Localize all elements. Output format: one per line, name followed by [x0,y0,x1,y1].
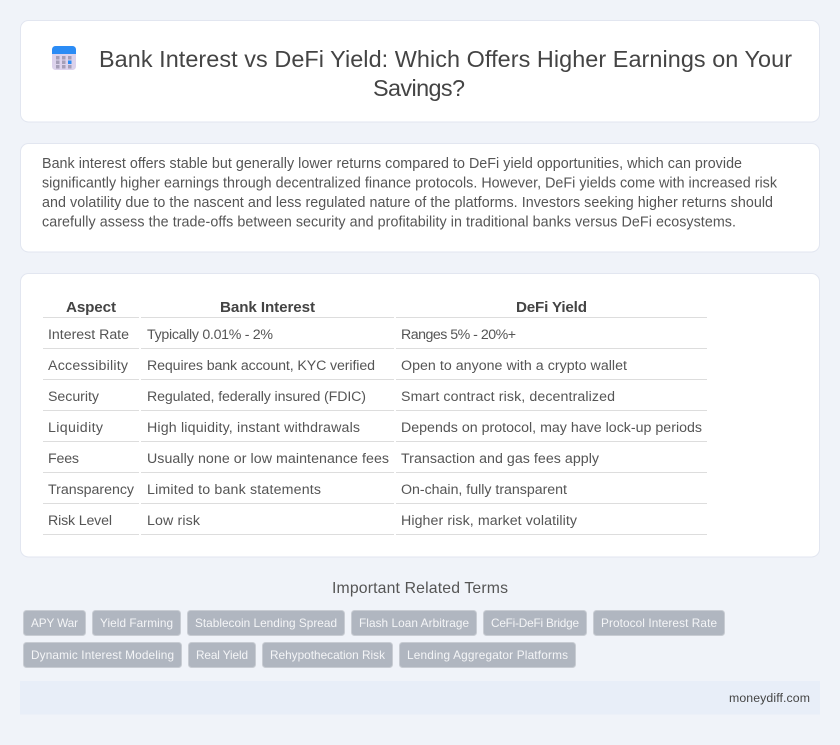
row: fees: Transaction and gas fees apply [401,451,600,467]
tag: Rehypothecation Risk: Rehypothecation Risk [270,648,385,662]
tag: Dynamic Interest Modeling [24,642,182,668]
tag: Stablecoin Lending Spread: Stablecoin Lending Spread [195,616,337,630]
tag: Flash Loan Arbitrage: Flash Loan Arbitrage [359,616,469,630]
row: fees: Fees [48,451,79,467]
tag: Stablecoin Lending Spread [188,610,344,636]
row: liquidity: Liquidity [48,420,104,436]
row: interest rate: Ranges 5% - 20%+ [401,327,516,343]
table header: DeFi Yield [516,299,587,316]
tag: Real Yield [188,642,256,668]
panel: summary paragraph: carefully assess the trade-offs between security and profitability in traditional banks versus DeFi ecosystems. [42,214,736,230]
row: liquidity [43,420,707,442]
row: security [43,389,707,411]
tag: APY War [24,610,86,636]
panel: summary paragraph: significantly higher earnings through decentralized finance protocols. However, DeFi yields come with increased risk [42,176,778,192]
row: transparency: On-chain, fully transparent [401,482,567,498]
footer bar [20,681,820,714]
tag: Yield Farming: Yield Farming [100,616,173,630]
row: fees: Usually none or low maintenance fees [147,451,389,467]
footer bar: moneydiff.com [729,691,810,705]
table header [43,299,707,318]
heading: important related terms: Important Related Terms [332,580,508,597]
tag: Rehypothecation Risk [262,642,392,668]
related term tags [24,610,724,668]
tag: APY War: APY War [31,616,78,630]
row: risk level: Higher risk, market volatility [401,513,578,529]
panel: title card [20,20,820,122]
row: accessibility: Open to anyone with a crypto wallet [401,358,627,374]
title text: Savings? [373,75,465,101]
panel: summary paragraph: Bank interest offers stable but generally lower returns compared to DeFi yield opportunities, which can provide [42,156,742,172]
row: accessibility [43,358,707,380]
tag: Protocol Interest Rate [594,610,724,636]
tag: Protocol Interest Rate: Protocol Interest Rate [601,616,717,630]
tag: Real Yield: Real Yield [196,648,248,662]
tag: CeFi-DeFi Bridge [484,610,586,636]
row: liquidity: Depends on protocol, may have lock-up periods [401,420,702,436]
panel: summary paragraph [20,144,820,252]
row: security: Smart contract risk, decentralized [401,389,615,405]
tag: Yield Farming [92,610,180,636]
row: interest rate: Interest Rate [48,327,129,343]
panel: summary paragraph: and volatility due to the nascent and less regulated nature of the platforms. Investors seeking higher returns should [42,195,773,211]
tag: CeFi-DeFi Bridge: CeFi-DeFi Bridge [491,616,579,630]
row: transparency: Limited to bank statements [147,482,321,498]
row: fees [43,451,707,473]
tag: Lending Aggregator Platforms [400,642,576,668]
row: transparency [43,482,707,504]
row: security: Regulated, federally insured (FDIC) [147,389,366,405]
row: transparency: Transparency [48,482,135,498]
row: risk level [43,513,707,535]
table header: Aspect [66,299,116,316]
row: security: Security [48,389,100,405]
row: risk level: Low risk [147,513,201,529]
title text [99,46,792,101]
panel: comparison table [20,274,820,557]
row: accessibility: Accessibility [48,358,129,374]
icon: calendar [52,46,76,70]
row: accessibility: Requires bank account, KYC verified [147,358,375,374]
title text: Bank Interest vs DeFi Yield: Which Offers Higher Earnings on Your [99,46,792,72]
table header: Bank Interest [220,299,315,316]
tag: Dynamic Interest Modeling: Dynamic Interest Modeling [31,648,174,662]
tag: Lending Aggregator Platforms: Lending Aggregator Platforms [407,648,568,662]
row: interest rate [43,327,707,349]
row: risk level: Risk Level [48,513,112,529]
tag: Flash Loan Arbitrage [352,610,476,636]
row: interest rate: Typically 0.01% - 2% [147,327,273,343]
row: liquidity: High liquidity, instant withdrawals [147,420,360,436]
